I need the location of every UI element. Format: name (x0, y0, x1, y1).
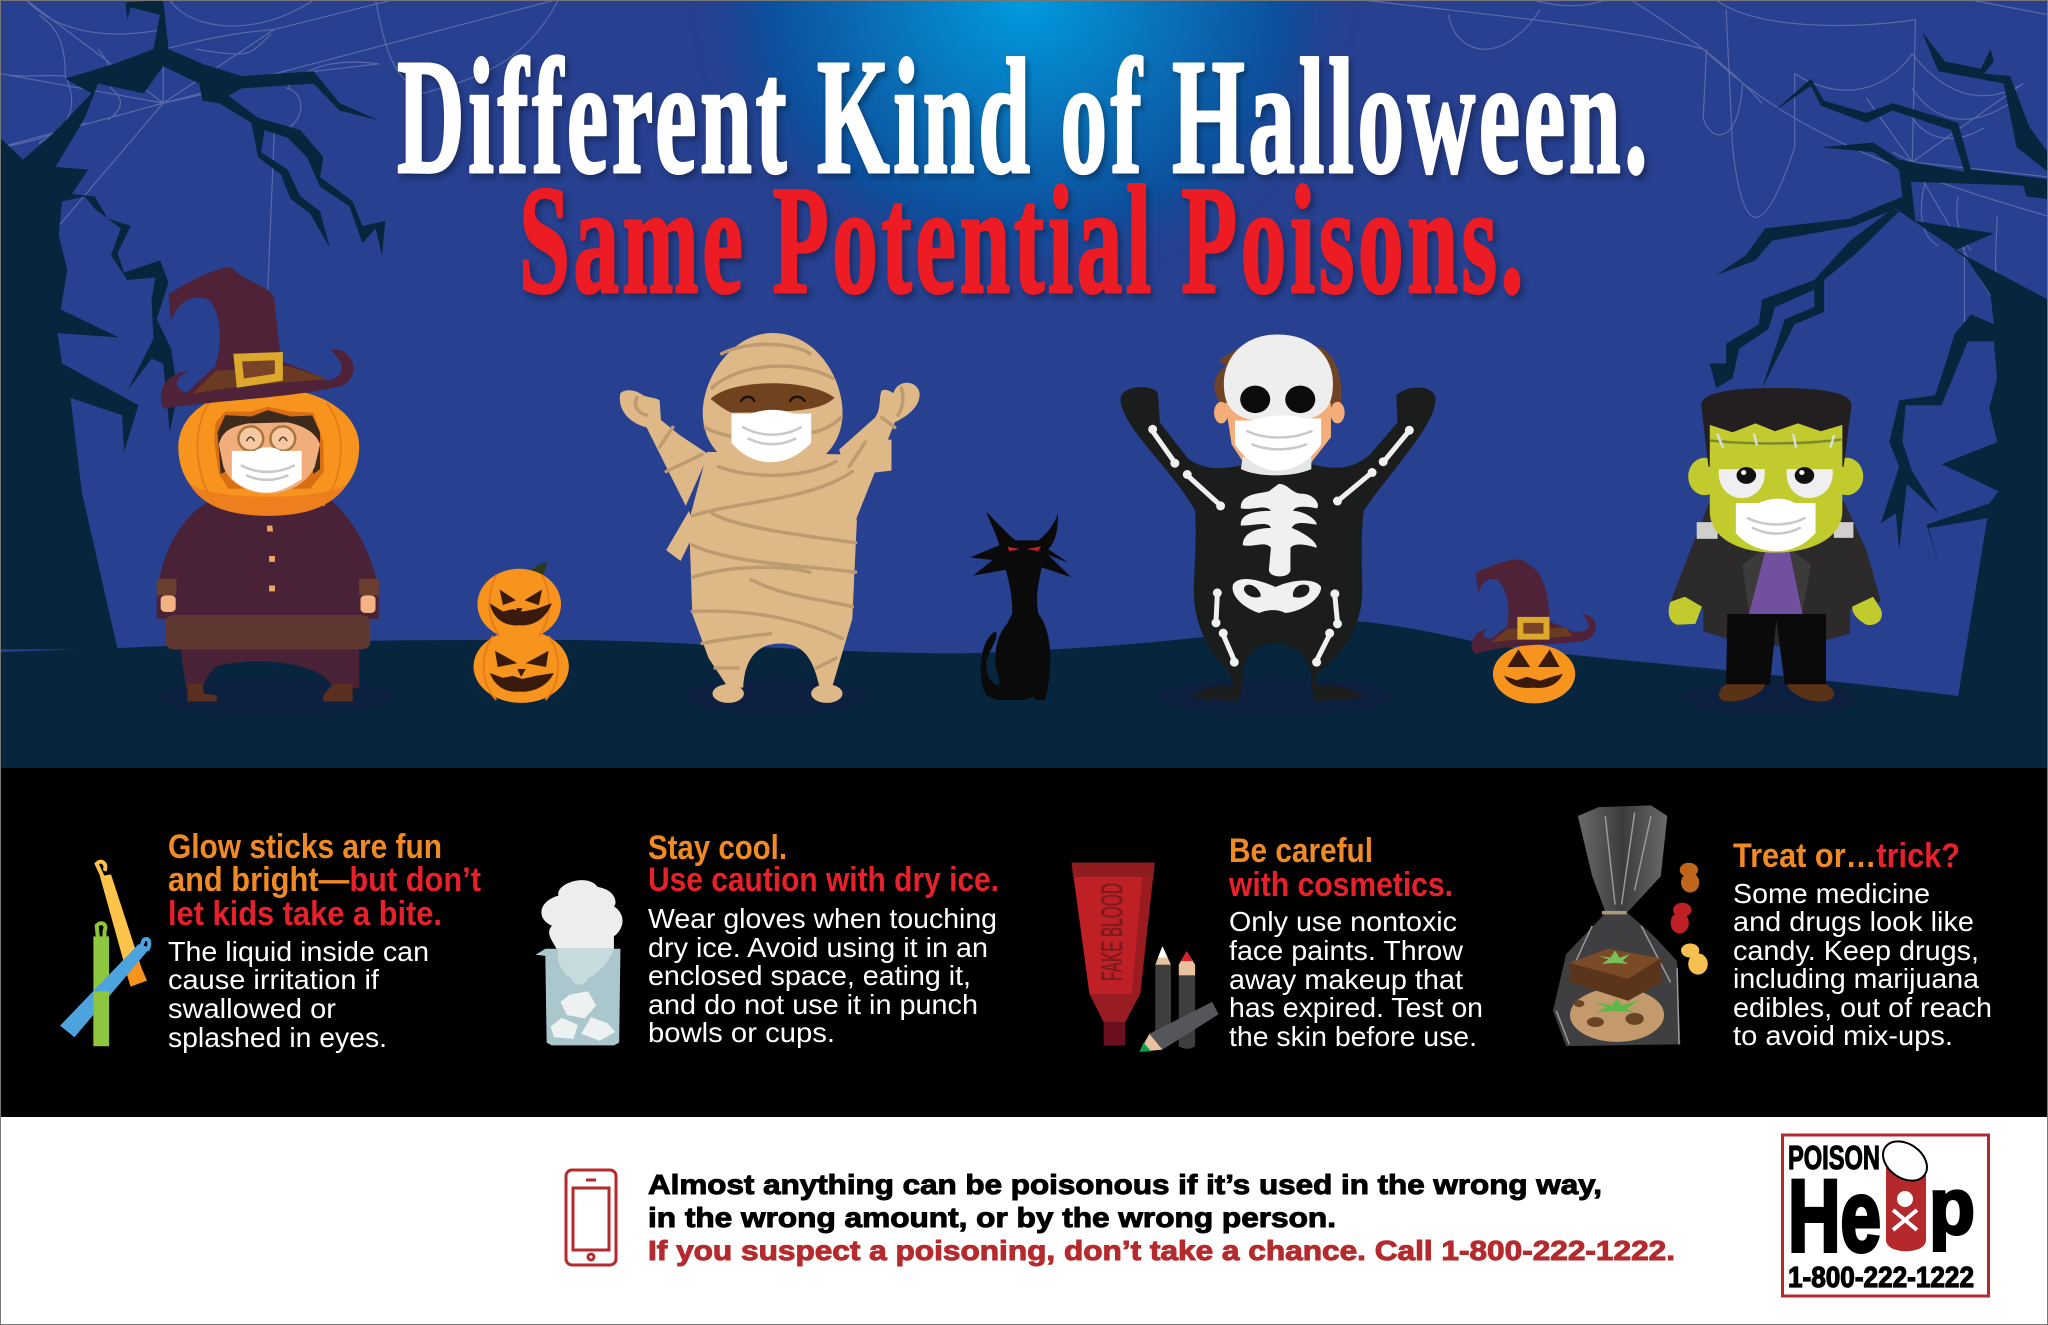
treat or trick text: edibles, out of reach (1733, 992, 1992, 1023)
panel: night scene background (0, 0, 2048, 768)
icon: bag of edibles and gummy bears (1553, 805, 1708, 1046)
character: Frankenstein monster (1669, 388, 1882, 715)
character: pumpkin witch (157, 267, 392, 714)
panel: white footer (0, 1117, 2048, 1325)
Poison Help logo: POISON (1788, 1139, 1880, 1176)
cosmetics text: has expired. Test on (1229, 992, 1483, 1023)
cosmetics text: with cosmetics. (1228, 866, 1453, 904)
Poison Help logo: p (1929, 1162, 1975, 1251)
glow sticks text: swallowed or (168, 993, 336, 1024)
Poison Help logo: He (1788, 1159, 1881, 1273)
character: mummy (620, 333, 920, 714)
dry ice text: bowls or cups. (648, 1017, 835, 1048)
icon: dry ice beaker (536, 880, 623, 1045)
witch-hat jack-o-lantern (1472, 559, 1596, 703)
black cat (970, 512, 1071, 700)
treat or trick text (1733, 837, 1992, 1051)
footer message: Almost anything can be poisonous if it’s used in the wrong way, (648, 1169, 1602, 1200)
panel: black tips band (0, 768, 2048, 1117)
dry ice text: Stay cool. (648, 829, 787, 867)
cosmetics text: Be careful (1229, 832, 1373, 870)
footer message: in the wrong amount, or by the wrong person. (648, 1202, 1336, 1233)
dry ice text: enclosed space, eating it, (648, 960, 971, 991)
cosmetics text: Only use nontoxic (1229, 906, 1457, 937)
treat or trick text: including marijuana (1733, 963, 1980, 994)
dry ice text (648, 829, 999, 1048)
glow sticks text: The liquid inside can (168, 936, 429, 967)
stacked jack-o-lanterns (473, 561, 569, 703)
character: skeleton (1121, 335, 1435, 714)
spider webs (0, 0, 558, 295)
dry ice text: Use caution with dry ice. (648, 861, 999, 899)
glow sticks text: Glow sticks are fun (168, 828, 442, 866)
Poison Help logo (1782, 1133, 1988, 1296)
logo bottle (1876, 1133, 1934, 1251)
icon: fake blood tube and makeup pencils (1072, 863, 1219, 1052)
left spooky tree (0, 0, 385, 649)
icon: glow sticks (60, 862, 150, 1046)
icon: fake blood tube and makeup pencils: FAKE BLOOD (1096, 883, 1129, 981)
treat or trick text: candy. Keep drugs, (1733, 935, 1979, 966)
glow sticks text: splashed in eyes. (168, 1022, 387, 1053)
Poison Help logo: 1-800-222-1222 (1788, 1262, 1974, 1294)
cosmetics text: the skin before use. (1229, 1021, 1477, 1052)
icon: smartphone (566, 1170, 616, 1265)
glow sticks text: cause irritation if (168, 964, 379, 995)
cosmetics text: face paints. Throw (1229, 935, 1463, 966)
treat or trick text: Treat or…trick? (1733, 837, 1960, 875)
dry ice text: dry ice. Avoid using it in an (648, 932, 988, 963)
treat or trick text: to avoid mix-ups. (1733, 1020, 1953, 1051)
cosmetics text: away makeup that (1229, 964, 1463, 995)
spider webs, right side (1364, 0, 2048, 383)
glow sticks text: and bright—but don’t (168, 861, 481, 899)
treat or trick text: and drugs look like (1733, 906, 1974, 937)
footer message: If you suspect a poisoning, don’t take a chance. Call 1-800-222-1222. (648, 1235, 1675, 1266)
ground hills (0, 620, 2048, 768)
glow sticks text: let kids take a bite. (168, 895, 442, 933)
dry ice text: Wear gloves when touching (648, 903, 997, 934)
footer message (648, 1169, 1675, 1266)
glow sticks text (168, 828, 481, 1053)
right spooky tree (1710, 32, 2048, 700)
cosmetics text (1228, 832, 1483, 1052)
treat or trick text: Some medicine (1733, 878, 1930, 909)
dry ice text: and do not use it in punch (648, 989, 978, 1020)
